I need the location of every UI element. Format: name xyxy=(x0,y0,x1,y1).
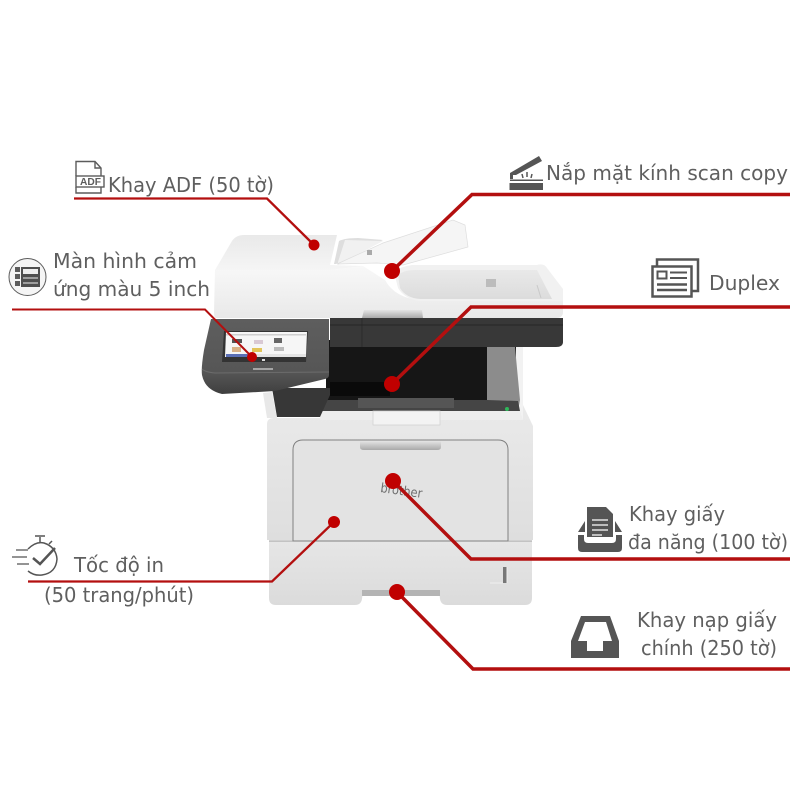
label: Nắp mặt kính scan copy xyxy=(546,161,788,185)
icon: scanner xyxy=(510,156,543,190)
status light xyxy=(505,407,509,411)
marker xyxy=(308,240,320,250)
label: Màn hình cảm xyxy=(53,249,197,273)
leader line xyxy=(12,310,252,357)
marker xyxy=(384,263,400,279)
lid handle xyxy=(362,310,423,318)
leader line xyxy=(393,481,790,559)
callout: Nắp mặt kính scan copy xyxy=(384,156,790,279)
panel housing xyxy=(202,319,329,394)
paper input tray xyxy=(334,238,383,264)
ADF document feeder and scanner lid xyxy=(214,220,563,318)
output tray recess xyxy=(394,264,563,301)
label: đa năng (100 tờ) xyxy=(628,530,788,554)
icon: settings screen xyxy=(9,258,46,296)
marker xyxy=(384,376,400,392)
panel stem xyxy=(272,388,330,417)
icon: inbox tray xyxy=(571,616,619,658)
touch screen xyxy=(222,331,308,362)
icon: ADF document: ADF xyxy=(80,177,101,188)
label: Khay nạp giấy xyxy=(637,608,777,632)
dark scanner band xyxy=(330,318,563,347)
control panel xyxy=(202,319,330,417)
leader line xyxy=(392,307,790,384)
panel model label xyxy=(253,368,273,370)
speed value: (50 trang/phút) xyxy=(44,583,194,607)
leader line xyxy=(74,198,314,245)
label: Tốc độ in xyxy=(73,553,164,577)
tray level indicator xyxy=(490,567,507,583)
icon: tray with document xyxy=(578,507,622,552)
callout: Khay giấy đa năng xyxy=(385,473,790,559)
label: Khay giấy xyxy=(629,502,725,526)
leader line xyxy=(397,592,790,669)
label: chính (250 tờ) xyxy=(641,636,777,660)
icon: stopwatch with check xyxy=(12,536,57,575)
marker xyxy=(385,473,401,489)
marker xyxy=(389,584,405,600)
callout: Màn hình cảm ứng xyxy=(9,249,257,362)
leader line xyxy=(392,194,790,271)
marker xyxy=(247,352,257,362)
marker xyxy=(328,516,340,528)
front door xyxy=(293,440,508,541)
door handle xyxy=(360,441,441,450)
callout: Khay ADF xyxy=(74,162,320,250)
callout: Khay nạp giấy chính xyxy=(389,584,790,669)
label: Khay ADF (50 tờ) xyxy=(108,173,274,197)
brother logo: brother xyxy=(379,481,424,502)
icon: duplex pages xyxy=(652,260,698,296)
callout: Tốc độ in xyxy=(12,516,340,607)
lower printer body xyxy=(263,340,533,605)
label: Duplex xyxy=(709,271,780,295)
label: ứng màu 5 inch xyxy=(53,277,210,301)
icon: ADF document xyxy=(76,162,104,193)
feeder top surface xyxy=(215,235,363,270)
leader line xyxy=(28,522,334,582)
scanner front face xyxy=(214,266,563,318)
output bay xyxy=(320,340,523,425)
callout: Duplex xyxy=(384,260,790,392)
printer illustration xyxy=(202,220,563,605)
